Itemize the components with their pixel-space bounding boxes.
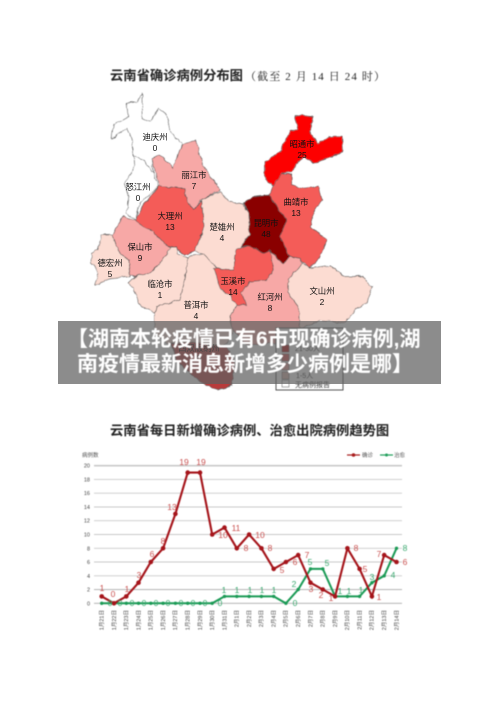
- headline banner: 【湖南本轮疫情已有6市现确诊病例,湖: [67, 328, 421, 351]
- x axis date labels: 1月21日: [98, 610, 106, 630]
- x axis date labels: 2月7日: [307, 610, 314, 627]
- map title: 云南省确诊病例分布图: [110, 67, 243, 83]
- region: Pu'er: [155, 253, 237, 352]
- x axis date labels: 2月3日: [258, 610, 265, 627]
- region: Yuxi: [214, 247, 273, 305]
- confirmed data labels: 0: [111, 589, 116, 599]
- label: Lincang: 1: [158, 290, 163, 300]
- confirmed data labels: 3: [137, 570, 142, 580]
- cured data labels: 0: [142, 598, 147, 608]
- confirmed data labels: 11: [232, 523, 241, 533]
- cured data labels: 0: [166, 598, 171, 608]
- label: Kunming: 昆明市: [253, 218, 279, 228]
- map legend: 1-5人: [296, 372, 313, 380]
- y axis labels: 18: [84, 477, 90, 483]
- region: Zhaotong: [265, 115, 343, 187]
- label: Xishuangbanna: 8: [197, 353, 202, 363]
- x axis date labels: 2月10日: [344, 610, 351, 630]
- y axis title: 病例数: [82, 451, 99, 459]
- label: Xishuangbanna: 西双版纳州: [178, 343, 220, 353]
- x axis date labels: 2月4日: [270, 610, 278, 627]
- x axis date labels: 2月1日: [234, 610, 241, 627]
- label: Lincang: 临沧市: [147, 279, 173, 289]
- cured data labels: 2: [292, 579, 297, 589]
- region: Honghe: [230, 250, 303, 345]
- confirmed data labels: 5: [363, 564, 368, 574]
- label: Zhaotong: 昭通市: [289, 139, 315, 149]
- x axis date labels: [98, 610, 400, 630]
- region: Chuxiong: [195, 192, 250, 270]
- cured data labels: 0: [108, 598, 113, 608]
- cured line series: [100, 547, 398, 605]
- y axis labels: 20: [84, 464, 90, 470]
- headline banner: [58, 321, 441, 384]
- label: Pu'er: 普洱市: [183, 300, 209, 310]
- label: Dehong: 5: [108, 269, 113, 279]
- label: Diqing: 0: [153, 143, 158, 153]
- y axis labels: 12: [84, 519, 90, 525]
- y axis labels: 8: [87, 546, 90, 552]
- x axis date labels: 2月6日: [295, 610, 302, 627]
- x axis date labels: 1月25日: [148, 610, 155, 630]
- x axis date labels: 1月31日: [221, 610, 228, 630]
- region: Lincang: [128, 247, 188, 313]
- map title: [110, 67, 385, 83]
- label: Nujiang: 怒江州: [125, 182, 151, 192]
- confirmed data labels: 6: [403, 557, 408, 567]
- y axis labels: [84, 464, 90, 607]
- x axis date labels: 2月14日: [393, 610, 400, 630]
- x axis date labels: 2月11日: [356, 610, 363, 630]
- y axis labels: 2: [87, 588, 90, 594]
- confirmed data labels: 8: [268, 543, 273, 553]
- x axis date labels: 1月30日: [209, 610, 216, 630]
- confirmed data labels: 1: [100, 583, 105, 593]
- confirmed data labels: 8: [354, 543, 359, 553]
- confirmed data labels: 7: [377, 549, 382, 559]
- cured data labels: 1: [222, 585, 227, 595]
- label: Yuxi: 14: [228, 287, 238, 297]
- cured data labels: 0: [118, 598, 123, 608]
- label: Dali: 13: [165, 222, 175, 232]
- cured data labels: 1: [347, 586, 352, 596]
- y axis labels: 10: [84, 532, 90, 538]
- confirmed line series: [99, 470, 399, 606]
- cured data labels: 8: [403, 543, 408, 553]
- label: Diqing: 迪庆州: [142, 132, 168, 142]
- x axis date labels: 2月9日: [332, 610, 339, 627]
- label: Kunming: 48: [261, 229, 271, 239]
- x axis date labels: 1月23日: [123, 610, 130, 630]
- label: Dehong: 德宏州: [97, 258, 123, 268]
- legend: 确诊: [362, 451, 374, 459]
- x axis date labels: 2月2日: [246, 610, 253, 627]
- confirmed data labels: 19: [196, 457, 206, 467]
- x axis date labels: 2月8日: [320, 610, 327, 627]
- map legend: 无病例报告: [295, 380, 330, 389]
- confirmed data labels: 3: [309, 584, 314, 594]
- confirmed data labels: 1: [125, 584, 130, 594]
- map title: （截至 2 月 14 日 24 时）: [245, 69, 385, 83]
- cured data labels: [108, 543, 408, 608]
- label: Zhaotong: 25: [297, 150, 307, 160]
- region: Diqing: [112, 93, 182, 173]
- cured data labels: 5: [325, 558, 330, 568]
- label: Pu'er: 4: [194, 311, 199, 321]
- x axis date labels: 2月13日: [381, 610, 388, 630]
- region: Wenshan: [288, 263, 373, 330]
- confirmed data labels: 1: [377, 592, 382, 602]
- x axis date labels: 1月27日: [172, 610, 179, 630]
- cured data labels: 3: [370, 572, 375, 582]
- region: Qujing: [270, 173, 327, 268]
- cured data labels: 1: [338, 586, 343, 596]
- region: Kunming: [242, 195, 290, 263]
- label: Wenshan: 2: [320, 297, 325, 307]
- cured data labels: 0: [218, 598, 223, 608]
- label: Honghe: 红河州: [257, 292, 283, 302]
- label: Dali: 大理州: [157, 211, 183, 221]
- label: Lijiang: 7: [192, 181, 197, 191]
- label: Yuxi: 玉溪市: [220, 276, 246, 286]
- confirmed data labels: 19: [179, 457, 189, 467]
- x axis date labels: 1月28日: [184, 610, 192, 630]
- confirmed data labels: 8: [161, 536, 166, 546]
- cured data labels: 1: [260, 585, 265, 595]
- cured data labels: 0: [154, 598, 159, 608]
- map legend: [276, 328, 343, 390]
- label: Chuxiong: 楚雄州: [209, 222, 235, 232]
- trend line chart: [82, 451, 408, 630]
- region: Dehong: [92, 235, 130, 286]
- label: Qujing: 13: [291, 208, 301, 218]
- region: Nujiang: [125, 140, 158, 220]
- cured data labels: 1: [248, 585, 253, 595]
- confirmed data labels: [100, 457, 408, 603]
- x axis date labels: 1月22日: [111, 610, 118, 630]
- x axis date labels: 1月29日: [197, 610, 204, 630]
- confirmed data labels: 10: [255, 530, 265, 540]
- confirmed data labels: 6: [150, 549, 155, 559]
- cured data labels: 0: [293, 598, 298, 608]
- chart title: 云南省每日新增确诊病例、治愈出院病例趋势图: [110, 422, 389, 438]
- confirmed data labels: 7: [305, 550, 310, 560]
- y axis labels: 14: [84, 505, 90, 511]
- headline banner: 南疫情最新消息新增多少病例是哪】: [77, 353, 413, 376]
- x axis date labels: 2月12日: [369, 610, 376, 630]
- confirmed data labels: 13: [167, 502, 177, 512]
- region: Baoshan: [112, 217, 172, 277]
- cured data labels: 0: [179, 598, 184, 608]
- grid lines: [94, 466, 402, 603]
- cured data labels: 1: [235, 585, 240, 595]
- label: Baoshan: 9: [138, 253, 143, 263]
- map legend: 21-30人: [295, 345, 320, 353]
- region: Xishuangbanna: [172, 342, 235, 390]
- cured data labels: 1: [272, 585, 277, 595]
- label: Qujing: 曲靖市: [283, 197, 309, 207]
- cured data labels: 0: [130, 598, 135, 608]
- label: Chuxiong: 4: [220, 233, 225, 243]
- legend: 治愈: [394, 451, 406, 459]
- x axis date labels: 1月24日: [135, 610, 142, 630]
- y axis labels: 16: [84, 491, 90, 497]
- confirmed data labels: 2: [319, 590, 324, 600]
- confirmed data labels: 6: [293, 557, 298, 567]
- cured data labels: 5: [308, 557, 313, 567]
- label: Baoshan: 保山市: [127, 242, 153, 252]
- legend: [347, 451, 406, 459]
- confirmed data labels: 10: [218, 530, 228, 540]
- confirmed data labels: 5: [280, 565, 285, 575]
- cured data labels: 1: [359, 585, 364, 595]
- label: Wenshan: 文山州: [309, 286, 335, 296]
- confirmed data labels: 1: [329, 593, 334, 603]
- y axis labels: 6: [87, 560, 90, 566]
- label: Nujiang: 0: [136, 193, 141, 203]
- x axis date labels: 1月26日: [160, 610, 167, 630]
- y axis labels: 4: [87, 574, 90, 580]
- map of Yunnan: [92, 93, 373, 390]
- cured data labels: 4: [391, 570, 396, 580]
- map labels: [97, 132, 335, 363]
- label: Lijiang: 丽江市: [181, 170, 207, 180]
- label: Honghe: 8: [268, 303, 273, 313]
- region: Lijiang: [152, 140, 220, 209]
- x axis date labels: 2月5日: [283, 610, 290, 627]
- cured data labels: 0: [203, 598, 208, 608]
- cured data labels: 0: [191, 598, 196, 608]
- confirmed data labels: 8: [244, 543, 249, 553]
- y axis labels: 0: [87, 601, 90, 607]
- region: Dali: [135, 186, 204, 255]
